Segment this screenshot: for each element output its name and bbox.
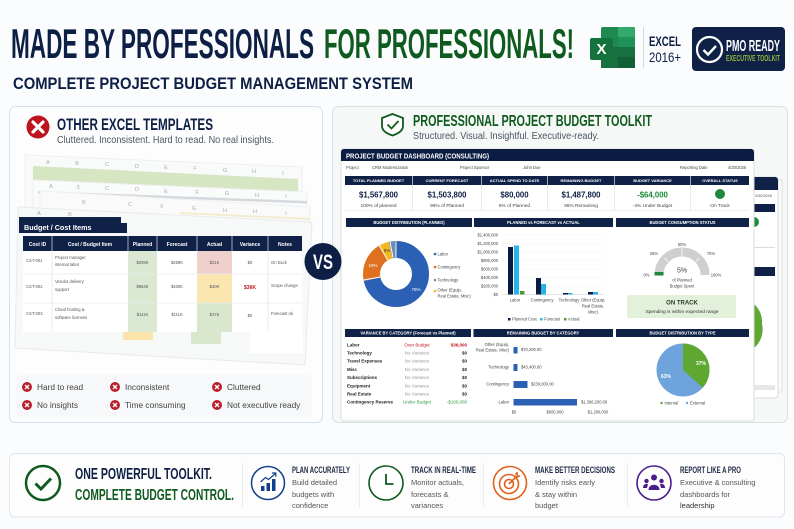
spreadsheet table: budget cost items: internal labor: [55, 262, 80, 267]
KPI cards: TOTAL PLANNED BUDGET: [353, 178, 405, 183]
table: variance by category: -$100,000: [447, 400, 467, 405]
icon: shield check: [382, 114, 403, 136]
chart: planned vs forecast vs actual: [474, 218, 613, 322]
stacked messy spreadsheets: C: [105, 162, 109, 168]
background dashboard sheets: [749, 177, 782, 398]
stacked messy spreadsheets: C: [105, 186, 109, 192]
table: variance by category: $0: [462, 384, 467, 388]
list of drawbacks: Time consuming: [125, 400, 186, 410]
chart: budget consumption gauge: [616, 218, 749, 318]
chart: planned vs forecast vs actual: $1,200,000: [478, 241, 499, 246]
chart: budget consumption gauge: Budget Spent: [670, 284, 695, 288]
table: variance by category: No Variance: [405, 392, 430, 397]
table: variance by category: Subscriptions: [347, 375, 378, 380]
table: variance by category: No Variance: [405, 375, 430, 380]
chart: remaining budget by category: [474, 329, 613, 414]
table: variance by category: [345, 329, 471, 405]
KPI cards: $1,503,800: [427, 190, 467, 200]
KPI cards: OVERALL STATUS: [702, 178, 738, 183]
chart: budget consumption gauge: Spending is within expected range: [645, 309, 719, 315]
spreadsheet table: budget cost items: Variance: [240, 242, 261, 248]
KPI cards: $80,000: [500, 190, 529, 200]
spreadsheet table: budget cost items: Planned: [133, 242, 152, 248]
chart: budget distribution donut: Labor: [438, 252, 449, 256]
table: variance by category: $36,000: [451, 342, 467, 348]
KPI cards: On Track: [710, 203, 730, 209]
spreadsheet table: budget cost items: Notes: [278, 242, 292, 248]
chart: remaining budget by category: $1,200,000: [588, 410, 609, 414]
project info row: CRM Modernization: [372, 165, 409, 170]
benefits headline: COMPLETE BUDGET CONTROL.: [75, 487, 234, 504]
stacked messy spreadsheets: A: [37, 211, 41, 217]
benefit: plan accurately: PLAN ACCURATELY: [292, 465, 350, 475]
benefit: track in real-time: variances: [411, 501, 443, 510]
KPI cards: BUDGET VARIANCE: [633, 178, 672, 183]
spreadsheet table: budget cost items: $0: [248, 260, 253, 265]
chart: remaining budget by category: $600,000: [546, 410, 564, 414]
icon: excel logo: X: [596, 41, 607, 58]
chart: budget distribution donut: 75%: [411, 287, 421, 292]
chart: budget consumption gauge: 75%: [707, 251, 715, 256]
chart: budget consumption gauge: 50%: [678, 242, 686, 247]
chart: budget distribution donut: BUDGET DISTRIBUTION (PLANNED): [373, 220, 445, 225]
table: variance by category: $0: [462, 359, 467, 364]
table: variance by category: No Variance: [405, 359, 430, 364]
benefit: track in real-time: TRACK IN REAL-TIME: [411, 465, 476, 475]
chart: planned vs forecast vs actual: Planned Cost: [512, 316, 537, 322]
chart: budget distribution by type: 63%: [661, 374, 672, 380]
list of drawbacks: [16, 375, 312, 417]
list of drawbacks: Not executive ready: [227, 400, 301, 410]
stacked messy spreadsheets: B: [82, 200, 86, 206]
chart: budget consumption gauge: 5%: [677, 268, 687, 274]
chart: planned vs forecast vs actual: $0: [493, 292, 499, 297]
table: variance by category: No Variance: [405, 350, 430, 356]
benefits headline: [75, 466, 234, 504]
dashboard title bar: PROJECT BUDGET DASHBOARD (CONSULTING): [346, 154, 489, 160]
subtitle: COMPLETE PROJECT BUDGET MANAGEMENT SYSTEM: [13, 75, 413, 93]
spreadsheet table: budget cost items: CST-001: [26, 258, 43, 263]
spreadsheet table: budget cost items: Cloud hosting &: [55, 307, 85, 312]
excel version label: 2016+: [649, 49, 681, 65]
table: variance by category: Real Estate: [347, 392, 372, 397]
VS badge: VS: [313, 251, 333, 274]
chart: budget consumption gauge: 100%: [711, 272, 722, 278]
stacked messy spreadsheets: H: [255, 193, 259, 199]
left panel tagline: Cluttered. Inconsistent. Hard to read. No real insights.: [57, 134, 274, 146]
KPI cards: 100% of planned: [360, 203, 397, 209]
stacked messy spreadsheets: 3: [76, 185, 80, 191]
chart: planned vs forecast vs actual: Contingency: [531, 298, 554, 302]
chart: budget distribution donut: 19%: [368, 263, 378, 268]
chart: remaining budget by category: Labor: [499, 400, 510, 404]
stacked messy spreadsheets: F: [160, 204, 164, 210]
spreadsheet table: budget cost items: $864K: [136, 284, 149, 289]
project info row: Reporting Date: [680, 165, 708, 170]
table: variance by category: Travel Expenses: [347, 359, 383, 364]
table: variance by category: $0: [462, 367, 467, 372]
VS badge: [304, 243, 342, 280]
benefit: track in real-time: forecasts &: [411, 490, 449, 499]
stacked messy spreadsheets: G: [223, 168, 227, 174]
chart: remaining budget by category: Real Estate, Misc): [476, 348, 510, 352]
KPI cards: 95% Remaining: [564, 203, 598, 209]
benefit: plan accurately: Build detailed: [292, 478, 337, 487]
benefit: make better decisions: MAKE BETTER DECISIONS: [535, 465, 615, 475]
right panel heading: PROFESSIONAL PROJECT BUDGET TOOLKIT: [413, 113, 652, 130]
benefit: make better decisions: & stay within: [535, 490, 577, 499]
benefit: report like a pro: dashboards for: [680, 490, 731, 499]
chart: remaining budget by category: REMAINING BUDGET BY CATEGORY: [507, 330, 580, 336]
benefit: make better decisions: budget: [535, 501, 559, 510]
chart: budget distribution by type: Internal: [664, 400, 678, 406]
chart: budget distribution donut: Contingency: [438, 264, 461, 270]
chart: budget distribution donut: Technology: [438, 278, 459, 282]
project info row: 4/30/2026: [728, 165, 747, 170]
panel: other excel templates: [10, 106, 322, 422]
table: variance by category: Technology: [347, 350, 372, 356]
table: variance by category: $0: [462, 392, 467, 397]
project info row: Project Sponsor: [460, 165, 490, 170]
chart: planned vs forecast vs actual: $800,000: [481, 258, 499, 263]
table: variance by category: No Variance: [405, 384, 430, 388]
spreadsheet table: budget cost items: $111K: [137, 312, 148, 317]
benefits headline: ONE POWERFUL TOOLKIT.: [75, 466, 212, 483]
spreadsheet table: budget cost items: software licenses: [55, 315, 87, 320]
benefit: report like a pro: REPORT LIKE A PRO: [680, 465, 741, 475]
icon: excel logo: [590, 27, 635, 68]
spreadsheet table: budget cost items: Forecast: [167, 242, 188, 248]
benefit: track in real-time: Monitor actuals,: [411, 478, 464, 487]
spreadsheet table: budget cost items: CST-003: [26, 311, 43, 316]
stacked messy spreadsheets: B: [75, 161, 79, 167]
KPI cards: $1,567,800: [359, 190, 399, 200]
chart: planned vs forecast vs actual: PLANNED vs FORECAST vs ACTUAL: [507, 220, 580, 225]
stacked messy spreadsheets: A: [49, 184, 53, 190]
chart: planned vs forecast vs actual: Actual: [568, 316, 579, 322]
benefit: make better decisions: [483, 463, 615, 510]
stacked messy spreadsheets: A: [46, 160, 50, 166]
benefit: plan accurately: confidence: [292, 501, 328, 510]
table: variance by category: $0: [462, 375, 467, 380]
chart: planned vs forecast vs actual: $1,000,000: [478, 250, 499, 254]
chart: budget distribution donut: 8%: [384, 248, 390, 253]
stacked messy spreadsheets: I: [282, 171, 284, 177]
stacked messy spreadsheets: G: [225, 191, 229, 197]
stacked messy spreadsheets: D: [135, 187, 139, 193]
stacked messy spreadsheets: H: [223, 208, 227, 214]
stacked messy spreadsheets: [15, 155, 312, 365]
chart: budget distribution by type: [616, 329, 749, 406]
table: variance by category: Labor: [347, 342, 360, 348]
spreadsheet table: budget cost items: CST-002: [26, 284, 43, 289]
chart: remaining budget by category: Technology: [488, 364, 510, 370]
title: FOR PROFESSIONALS!: [324, 20, 574, 67]
chart: planned vs forecast vs actual: $600,000: [481, 266, 499, 272]
excel version label: EXCEL: [649, 33, 681, 49]
list of drawbacks: Cluttered: [227, 382, 261, 392]
spreadsheet table: budget cost items: $21K: [210, 260, 220, 265]
chart: planned vs forecast vs actual: Other (Equip,: [581, 298, 605, 302]
chart: budget distribution donut: [346, 218, 472, 298]
chart: remaining budget by category: $0: [512, 410, 517, 414]
project info row: John Doe: [523, 165, 541, 170]
chart: budget distribution donut: Other (Equip,: [438, 288, 462, 292]
stacked messy spreadsheets: E: [164, 165, 168, 171]
chart: budget consumption gauge: 25%: [650, 251, 658, 256]
dashboard: project budget: [341, 149, 754, 421]
chart: remaining budget by category: $43,400.00: [521, 364, 542, 370]
spreadsheet table: budget cost items: Cost / Budget Item: [68, 242, 113, 248]
excel version label: [643, 27, 681, 68]
chart: budget consumption gauge: of Planned: [672, 278, 693, 282]
icon: green check: [26, 466, 60, 500]
KPI cards: -4% Under Budget: [633, 203, 673, 209]
spreadsheet table: budget cost items: $400K: [171, 284, 183, 289]
spreadsheet table: budget cost items: support: [55, 287, 70, 292]
dashboard title bar: [341, 149, 754, 161]
chart: budget consumption gauge: ON TRACK: [666, 300, 698, 306]
benefit: report like a pro: leadership: [680, 501, 715, 510]
chart: budget consumption gauge: BUDGET CONSUMPTION STATUS: [649, 220, 716, 225]
chart: budget distribution by type: BUDGET DISTRIBUTION BY TYPE: [649, 330, 716, 336]
spreadsheet table: budget cost items: Forecast ok: [271, 311, 294, 316]
chart: budget distribution by type: External: [690, 400, 705, 406]
list of drawbacks: Inconsistent: [125, 382, 170, 392]
chart: budget consumption gauge: 0%: [644, 272, 650, 278]
title: MADE BY PROFESSIONALS: [11, 20, 314, 67]
chart: planned vs forecast vs actual: $400,000: [481, 275, 499, 280]
spreadsheet table: budget cost items: $259K: [171, 260, 183, 265]
table: variance by category: Under Budget: [403, 400, 432, 405]
chart: planned vs forecast vs actual: Misc): [588, 310, 599, 314]
KPI cards: ACTUAL SPEND TO DATE: [490, 178, 540, 183]
list of drawbacks: Hard to read: [37, 382, 84, 392]
spreadsheet table: budget cost items: $36K: [244, 285, 256, 291]
icon: red cross: [26, 116, 50, 138]
stacked messy spreadsheets: F: [193, 166, 197, 172]
spreadsheet table: budget cost items: Actual: [207, 242, 223, 248]
spreadsheet table: budget cost items: [19, 217, 302, 332]
table: variance by category: Misc: [347, 367, 358, 372]
chart: remaining budget by category: $230,000.00: [531, 382, 554, 386]
spreadsheet table: budget cost items: $0: [248, 313, 253, 318]
stacked messy spreadsheets: E: [164, 189, 168, 195]
table: variance by category: Over Budget: [404, 342, 430, 348]
project info row: Project: [346, 165, 360, 170]
stacked messy spreadsheets: C: [128, 202, 132, 208]
spreadsheet table: budget cost items: Budget / Cost Items: [24, 223, 92, 232]
bottom benefits band: [10, 454, 784, 517]
stacked messy spreadsheets: D: [135, 164, 139, 170]
chart: remaining budget by category: Contingency: [486, 382, 510, 386]
list of drawbacks: No insights: [37, 400, 78, 410]
table: variance by category: No Variance: [405, 367, 430, 372]
badge: PMO ready: [692, 27, 785, 71]
spreadsheet table: budget cost items: $111K: [171, 312, 183, 317]
panel: professional project budget toolkit: [332, 106, 788, 422]
benefit: track in real-time: [359, 463, 476, 510]
table: variance by category: Contingency Reserve: [347, 400, 394, 405]
spreadsheet table: budget cost items: Project manager: [55, 255, 86, 260]
benefit: report like a pro: Executive & consulting: [680, 478, 755, 487]
stacked messy spreadsheets: F: [195, 190, 199, 196]
KPI cards: 5% of Planned: [499, 203, 530, 209]
chart: planned vs forecast vs actual: Technology: [559, 298, 580, 302]
benefit: plan accurately: [242, 463, 350, 510]
table: variance by category: VARIANCE BY CATEGORY (Forecast vs Planned): [360, 330, 456, 336]
right panel tagline: Structured. Visual. Insightful. Executive-ready.: [413, 130, 599, 142]
chart: remaining budget by category: Other (Equip,: [485, 342, 509, 347]
left panel heading: OTHER EXCEL TEMPLATES: [57, 115, 213, 134]
benefit: report like a pro: [627, 463, 755, 510]
chart: planned vs forecast vs actual: $1,400,000: [478, 232, 499, 238]
background dashboard sheets: 4/30/2026: [755, 194, 772, 198]
benefit: plan accurately: budgets with: [292, 490, 334, 499]
table: variance by category: Equipment: [347, 384, 371, 388]
chart: budget distribution donut: Real Estate, Misc): [438, 294, 471, 298]
KPI cards: CURRENT FORECAST: [426, 178, 469, 183]
spreadsheet table: budget cost items: Scope change: [271, 283, 298, 288]
spreadsheet table: budget cost items: $17K: [210, 312, 220, 317]
chart: planned vs forecast vs actual: Labor: [510, 298, 521, 302]
spreadsheet table: budget cost items: $40K: [210, 284, 220, 289]
chart: budget distribution by type: 37%: [696, 361, 707, 367]
chart: planned vs forecast vs actual: $200,000: [481, 284, 499, 288]
chart: remaining budget by category: $1,396,200.00: [581, 400, 608, 404]
chart: planned vs forecast vs actual: Forecast: [544, 316, 561, 322]
stacked messy spreadsheets: G: [192, 206, 196, 212]
KPI cards: 96% of Planned: [430, 203, 464, 209]
spreadsheet table: budget cost items: Cost ID: [29, 242, 47, 248]
project info row: [346, 165, 747, 170]
chart: remaining budget by category: $70,200.00: [521, 347, 542, 352]
chart: planned vs forecast vs actual: Real Estate,: [582, 304, 604, 308]
spreadsheet table: budget cost items: $259K: [136, 260, 149, 265]
KPI cards: -$64,000: [637, 190, 669, 200]
stacked messy spreadsheets: B: [68, 212, 72, 218]
stacked messy spreadsheets: H: [252, 169, 256, 175]
spreadsheet table: budget cost items: Vendor delivery: [55, 279, 85, 284]
stacked messy spreadsheets: H: [253, 209, 257, 215]
stacked messy spreadsheets: I: [285, 194, 287, 200]
KPI cards: [345, 176, 749, 210]
KPI cards: $1,487,800: [561, 190, 601, 200]
stacked messy spreadsheets: I: [285, 211, 287, 217]
spreadsheet table: budget cost items: On track: [271, 260, 288, 265]
KPI cards: REMAINING BUDGET: [561, 178, 602, 183]
table: variance by category: $0: [462, 350, 467, 356]
benefit: make better decisions: Identify risks early: [535, 478, 595, 487]
